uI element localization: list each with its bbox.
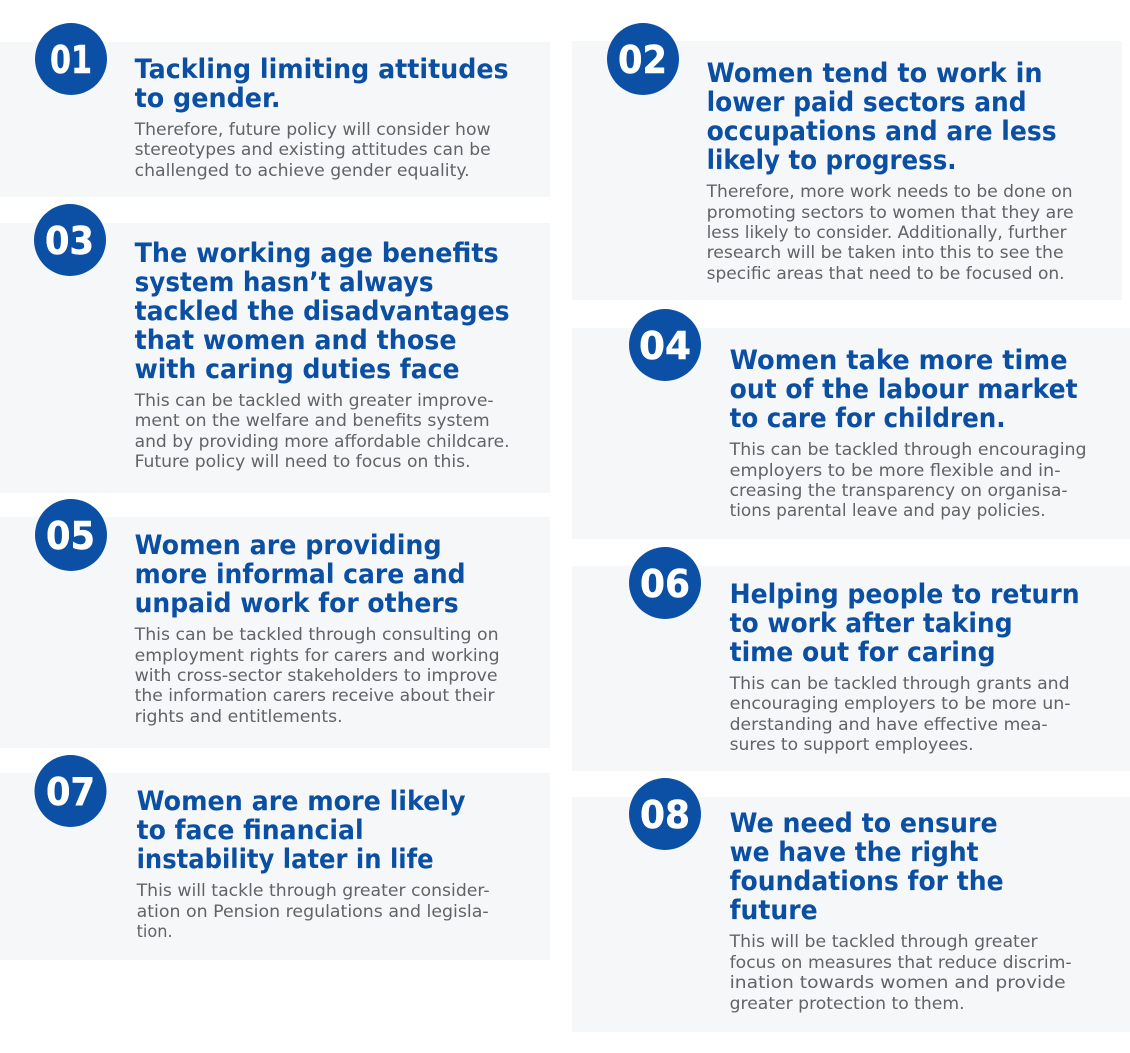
- heading 03: [135, 238, 510, 385]
- body 05: This can be tackled through consulting on: [134, 625, 499, 644]
- body 03: [134, 391, 510, 471]
- body 03: ment on the welfare and benefits system: [135, 411, 490, 430]
- heading 03: system hasn’t always: [135, 267, 434, 298]
- body 06: [729, 674, 1071, 754]
- body 02: less likely to consider. Additionally, further: [707, 223, 1067, 242]
- badge 08: 08: [640, 793, 690, 837]
- heading 07: to face financial: [137, 815, 364, 846]
- body 06: encouraging employers to be more un-: [730, 694, 1071, 713]
- body 08: [729, 932, 1072, 1013]
- panel 07: financial instability: [0, 755, 550, 960]
- badge 07: [34, 755, 106, 827]
- body 07: tion.: [137, 922, 173, 941]
- heading 06: to work after taking: [730, 608, 1013, 639]
- badge 06: 06: [640, 562, 690, 606]
- panel 02: lower paid sectors: [572, 23, 1122, 300]
- body 05: the information carers receive about their: [135, 686, 495, 705]
- heading 05: more informal care and: [135, 559, 466, 590]
- body 07: This will tackle through greater consider-: [136, 881, 490, 900]
- heading 02: Women tend to work in: [707, 58, 1043, 89]
- body 05: employment rights for carers and working: [135, 646, 500, 665]
- panel 03: benefits system: [0, 204, 550, 493]
- heading 08: we have the right: [730, 837, 979, 868]
- body 08: This will be tackled through greater: [729, 932, 1038, 951]
- heading 05: [135, 530, 466, 619]
- heading 01: Tackling limiting attitudes: [135, 54, 509, 85]
- heading 04: to care for children.: [730, 403, 1006, 434]
- body 03: Future policy will need to focus on this.: [135, 452, 471, 471]
- heading 01: to gender.: [135, 83, 281, 114]
- panel 04: time out of labour market: [572, 309, 1130, 539]
- heading 08: [730, 808, 1004, 926]
- panel 06: return to work: [572, 547, 1130, 771]
- body 04: creasing the transparency on organisa-: [730, 481, 1068, 500]
- body 01: challenged to achieve gender equality.: [135, 161, 470, 180]
- body 04: This can be tackled through encouraging: [729, 440, 1087, 459]
- body 08: focus on measures that reduce discrim-: [730, 953, 1072, 972]
- heading 06: [730, 579, 1080, 668]
- body 06: derstanding and have effective mea-: [730, 715, 1048, 734]
- body 08: ination towards women and provide: [730, 973, 1066, 992]
- body 02: research will be taken into this to see the: [707, 243, 1064, 262]
- badge 02: [607, 23, 679, 95]
- heading 07: Women are more likely: [137, 786, 466, 817]
- panel 05: informal care: [0, 499, 550, 748]
- body 04: tions parental leave and pay policies.: [730, 501, 1046, 520]
- body 01: stereotypes and existing attitudes can be: [135, 140, 491, 159]
- badge 03: 03: [45, 219, 94, 263]
- heading 01: [135, 54, 509, 114]
- panel 08: right foundations: [572, 778, 1130, 1032]
- heading 04: [730, 345, 1078, 434]
- body 04: [729, 440, 1087, 520]
- badge 04: [629, 309, 701, 381]
- body 02: Therefore, more work needs to be done on: [706, 182, 1073, 201]
- body 02: specific areas that need to be focused on.: [707, 264, 1065, 283]
- body 05: with cross-sector stakeholders to improve: [135, 666, 498, 685]
- body 03: and by providing more affordable childcare.: [135, 432, 510, 451]
- body 02: [706, 182, 1074, 283]
- heading 06: Helping people to return: [730, 579, 1080, 610]
- heading 08: future: [730, 895, 818, 926]
- body 01: [134, 120, 491, 180]
- body 06: sures to support employees.: [730, 735, 974, 754]
- badge 05: 05: [46, 514, 95, 558]
- heading 05: Women are providing: [135, 530, 442, 561]
- heading 02: lower paid sectors and: [707, 87, 1027, 118]
- heading 03: The working age benefits: [135, 238, 499, 269]
- badge 01: [35, 23, 107, 95]
- body 04: employers to be more flexible and in-: [730, 461, 1061, 480]
- badge 05: [35, 499, 107, 571]
- body 02: promoting sectors to women that they are: [707, 203, 1074, 222]
- badge 01: 01: [50, 38, 92, 82]
- body 05: rights and entitlements.: [135, 707, 343, 726]
- body 05: [134, 625, 500, 726]
- body 01: Therefore, future policy will consider how: [134, 120, 491, 139]
- heading 07: instability later in life: [137, 844, 434, 875]
- heading 02: likely to progress.: [707, 145, 957, 176]
- heading 02: [707, 58, 1057, 176]
- heading 07: [137, 786, 466, 875]
- heading 08: We need to ensure: [730, 808, 998, 839]
- badge 02: 02: [618, 38, 667, 82]
- heading 03: with caring duties face: [135, 354, 460, 385]
- heading 04: Women take more time: [730, 345, 1068, 376]
- body 07: [136, 881, 490, 941]
- heading 08: foundations for the: [730, 866, 1004, 897]
- heading 04: out of the labour market: [730, 374, 1078, 405]
- heading 03: tackled the disadvantages: [135, 296, 510, 327]
- heading 03: that women and those: [135, 325, 457, 356]
- body 08: greater protection to them.: [730, 994, 965, 1013]
- badge 07: 07: [46, 770, 95, 814]
- body 07: ation on Pension regulations and legisla-: [137, 902, 489, 921]
- badge 06: [629, 547, 701, 619]
- badge 08: [629, 778, 701, 850]
- badge 03: [34, 204, 106, 276]
- panel 01: limiting attitudes: [0, 23, 550, 197]
- body 03: This can be tackled with greater improve-: [134, 391, 494, 410]
- heading 05: unpaid work for others: [135, 588, 459, 619]
- heading 02: occupations and are less: [707, 116, 1057, 147]
- heading 06: time out for caring: [730, 637, 996, 668]
- body 06: This can be tackled through grants and: [729, 674, 1070, 693]
- badge 04: 04: [639, 324, 691, 368]
